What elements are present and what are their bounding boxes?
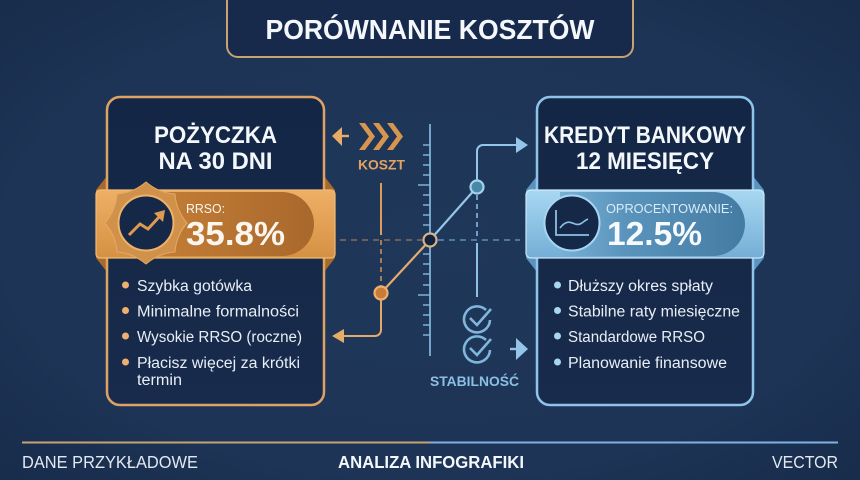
heading: loan: NA 30 DNI — [158, 148, 272, 175]
footer: DANE PRZYKŁADOWE — [22, 452, 198, 472]
label: stability: STABILNOŚĆ — [430, 372, 519, 389]
list: credit features: Standardowe RRSO — [568, 329, 705, 346]
list: loan features — [122, 278, 302, 389]
arrow: to loan panel — [332, 300, 381, 343]
interest value: OPROCENTOWANIE: — [606, 201, 733, 216]
arrow and chevrons: cost — [332, 123, 403, 150]
list: credit features — [554, 278, 740, 372]
heading: credit — [544, 122, 746, 175]
footer: ANALIZA INFOGRAFIKI — [338, 452, 524, 472]
panel: loan 30 days — [96, 97, 335, 405]
icon: rising chart badge — [105, 182, 187, 264]
list: loan features: termin — [137, 372, 182, 389]
footer: VECTOR — [772, 452, 838, 472]
list: loan features: Wysokie RRSO (roczne) — [137, 329, 302, 346]
line: stability segment — [430, 187, 477, 240]
list: credit features: Stabilne raty miesięczne — [568, 304, 740, 320]
node: center — [424, 234, 436, 246]
icon: line chart badge — [544, 196, 600, 250]
arrow: to credit panel — [477, 137, 528, 180]
list: credit features: Planowanie finansowe — [568, 355, 727, 372]
interest value — [606, 201, 733, 252]
node: cost — [374, 286, 388, 300]
label: cost: KOSZT — [358, 156, 405, 172]
line: cost segment — [381, 240, 430, 293]
footer — [22, 442, 838, 472]
list: loan features: Płacisz więcej za krótki — [137, 355, 300, 372]
interest band — [526, 190, 764, 258]
heading: loan — [154, 122, 277, 175]
title box — [227, 0, 633, 57]
heading: loan: POŻYCZKA — [154, 122, 277, 149]
heading: credit: KREDYT BANKOWY — [544, 122, 746, 149]
node: stability — [470, 180, 484, 194]
RRSO value: 35.8% — [186, 215, 285, 252]
list: loan features: Minimalne formalności — [137, 304, 299, 320]
interest value: 12.5% — [607, 215, 702, 252]
icon: stability checks — [464, 306, 491, 362]
panel: bank credit 12 months — [526, 97, 764, 405]
list: loan features: Szybka gotówka — [137, 278, 252, 295]
RRSO value — [186, 201, 285, 252]
title box: PORÓWNANIE KOSZTÓW — [266, 14, 595, 45]
list: credit features: Dłuższy okres spłaty — [568, 278, 713, 295]
RRSO band — [96, 182, 335, 264]
RRSO value: RRSO: — [186, 201, 225, 216]
center chart: cost vs stability — [332, 123, 528, 389]
heading: credit: 12 MIESIĘCY — [576, 148, 714, 175]
arrow: stability — [510, 338, 528, 360]
